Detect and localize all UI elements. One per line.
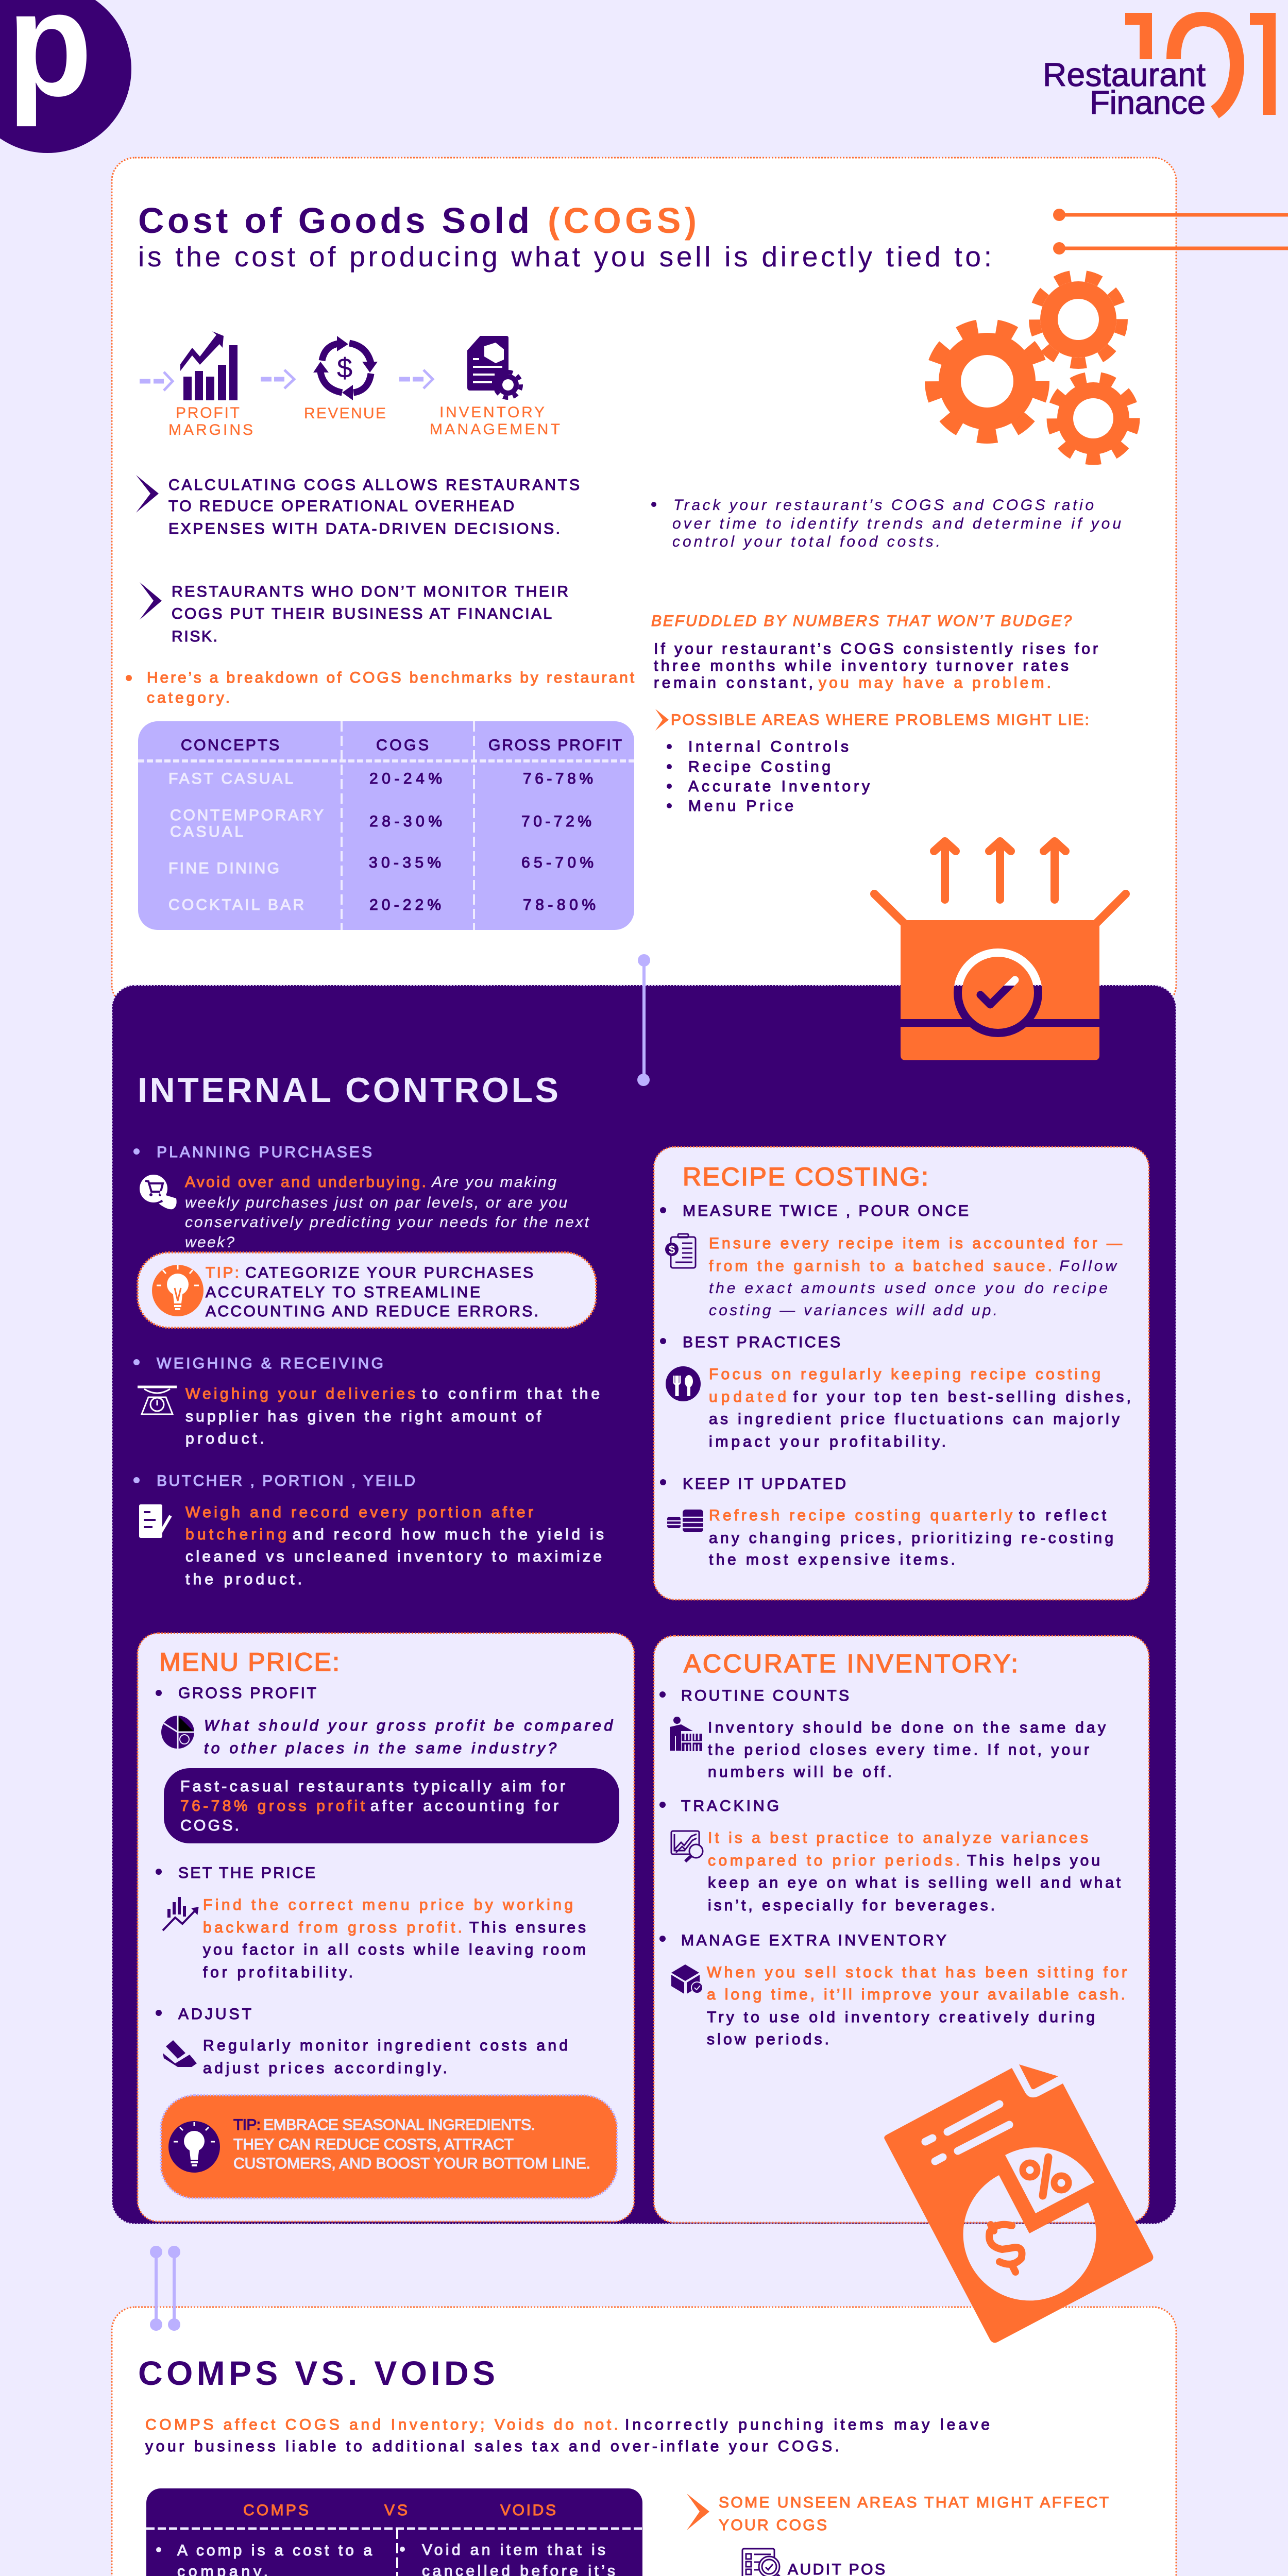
section: weighing and receiving: product. — [185, 1430, 264, 1447]
card: accurate inventory: This helps you — [967, 1852, 1100, 1869]
icon: orange report with pie chart — [884, 2064, 1153, 2343]
table: COGS benchmarks: FAST CASUAL — [168, 770, 293, 787]
card: recipe costing: Refresh recipe costing quarterly — [709, 1507, 1012, 1524]
callout: tip categorize purchases: ACCURATELY TO STREAMLINE — [206, 1284, 480, 1301]
callout: tip categorize purchases: TIP: — [206, 1264, 239, 1281]
card: recipe costing: Ensure every recipe item is accounted for — — [709, 1235, 1122, 1252]
text: befuddled by numbers — [651, 613, 1098, 691]
card: accurate inventory: Inventory should be done on the same day — [708, 1719, 1106, 1736]
callout: tip seasonal ingredients: TIP: — [233, 2116, 261, 2133]
card: menu price: for profitability. — [203, 1964, 353, 1981]
series logo: Restaurant Finance 101: Finance — [1090, 84, 1206, 121]
text: track COGS — [651, 497, 1121, 550]
card: recipe costing: the most expensive items. — [709, 1551, 955, 1568]
panel: comps vs voids — [0, 2307, 1176, 2576]
text: befuddled by numbers: you may have a problem. — [819, 674, 1051, 691]
card: accurate inventory — [654, 1636, 1149, 2223]
text: comps intro: COMPS affect COGS and Inventory; Voids do not. — [145, 2416, 618, 2433]
card: recipe costing: Focus on regularly keeping recipe costing — [709, 1366, 1100, 1383]
icon: cost clipboard — [665, 1234, 696, 1268]
text: track COGS: over time to identify trends and determine if you — [672, 515, 1121, 532]
table: COGS benchmarks: 28-30% — [369, 813, 442, 830]
card: menu price: you factor in all costs while leaving room — [203, 1941, 586, 1958]
table: COGS benchmarks: GROSS PROFIT — [488, 737, 622, 754]
panel: what is COGS — [112, 158, 1288, 1008]
connector lines top right — [1053, 209, 1288, 255]
table: COGS benchmarks: 70-72% — [521, 813, 591, 830]
section: butcher portion yield: butchering — [185, 1526, 286, 1543]
panel: internal controls — [112, 985, 1176, 2224]
table: COGS benchmarks: 78-80% — [523, 896, 596, 913]
text: benchmark intro — [126, 669, 635, 706]
card: accurate inventory: It is a best practice to analyze variances — [708, 1829, 1088, 1846]
card: recipe costing: for your top ten best-selling dishes, — [793, 1388, 1131, 1405]
heading: internal controls: INTERNAL CONTROLS — [138, 1071, 558, 1110]
list: comps: A comp is a cost to a — [177, 2542, 372, 2559]
icon: chart under magnifier — [671, 1831, 703, 1861]
icon: revenue cycle — [313, 336, 378, 400]
card: menu price: backward from gross profit. — [203, 1919, 462, 1936]
panel background — [112, 2307, 1176, 2576]
card: accurate inventory: a long time, it’ll improve your available cash. — [707, 1986, 1125, 2003]
icon: person counting boxes — [670, 1717, 702, 1751]
table: COGS benchmarks: CONTEMPORARY — [170, 807, 324, 824]
label: profit margins: PROFIT — [176, 404, 240, 421]
callout: calculating COGS: TO REDUCE OPERATIONAL OVERHEAD — [168, 498, 514, 515]
callout: fast-casual target: Fast-casual restaurants typically aim for — [180, 1778, 565, 1795]
label: profit margins — [168, 404, 253, 438]
heading: unseen areas: YOUR COGS — [719, 2517, 827, 2534]
card: menu price: ADJUST — [178, 2006, 251, 2023]
card: accurate inventory: keep an eye on what is selling well and what — [708, 1874, 1121, 1891]
table: COGS benchmarks — [138, 721, 634, 930]
table: COGS benchmarks: COCKTAIL BAR — [168, 896, 304, 913]
icon: light bulb — [168, 2121, 220, 2173]
icon: cart — [140, 1175, 177, 1209]
card: menu price: MENU PRICE: — [159, 1648, 340, 1676]
icon: checked package — [671, 1964, 703, 1994]
text: comps intro: Incorrectly punching items may leave — [625, 2416, 990, 2433]
table: comps vs voids: VOIDS — [500, 2502, 556, 2519]
list: voids — [400, 2541, 623, 2576]
text: comps intro: your business liable to additional sales tax and over-inflate your COGS. — [145, 2438, 839, 2455]
icon: plate with fork and spoon — [666, 1366, 701, 1401]
card: accurate inventory: ROUTINE COUNTS — [681, 1687, 849, 1704]
heading: Cost of Goods Sold: Cost of Goods Sold — [138, 200, 530, 241]
icon: revenue cycle: $ — [337, 353, 352, 384]
panel background — [112, 985, 1176, 2224]
text: befuddled by numbers: If your restaurant’s COGS consistently rises for — [654, 640, 1098, 657]
text: befuddled by numbers: remain constant, — [654, 674, 813, 691]
series logo: Restaurant Finance 101: Restaurant — [1043, 56, 1206, 93]
card: accurate inventory: When you sell stock that has been sitting for — [707, 1964, 1127, 1981]
card: accurate inventory: Try to use old inventory creatively during — [707, 2009, 1095, 2026]
panel background — [112, 158, 1176, 1008]
callout: restaurants who don't monitor — [140, 582, 568, 645]
text: track COGS: control your total food costs. — [672, 533, 940, 550]
section: weighing and receiving: supplier has given the right amount of — [185, 1408, 541, 1425]
card: menu price: Find the correct menu price by working — [203, 1896, 573, 1913]
card: recipe costing — [654, 1147, 1149, 1600]
arrow: into profit margins — [140, 372, 173, 391]
list: possible problem areas: POSSIBLE AREAS WHERE PROBLEMS MIGHT LIE: — [671, 711, 1089, 728]
icon: audit checklist — [742, 2549, 787, 2576]
section: planning purchases: PLANNING PURCHASES — [157, 1144, 372, 1161]
label: inventory management — [430, 404, 560, 438]
section: butcher portion yield — [133, 1472, 604, 1588]
callout: calculating COGS: EXPENSES WITH DATA-DRIVEN DECISIONS. — [168, 520, 560, 537]
section: butcher portion yield: BUTCHER , PORTION , YEILD — [157, 1472, 415, 1489]
list: possible problem areas: Menu Price — [688, 798, 793, 815]
section: weighing and receiving: to confirm that the — [422, 1385, 600, 1402]
card: menu price — [138, 1633, 634, 2222]
callout: calculating COGS: CALCULATING COGS ALLOWS RESTAURANTS — [168, 477, 580, 494]
icon: money in hand — [163, 2040, 197, 2067]
callout: fast-casual target: 76-78% gross profit — [180, 1798, 365, 1815]
table: COGS benchmarks: FINE DINING — [168, 860, 279, 877]
callout: calculating COGS — [136, 475, 580, 537]
card: recipe costing: KEEP IT UPDATED — [683, 1476, 846, 1493]
table: comps vs voids: VS — [384, 2502, 408, 2519]
section: butcher portion yield: and record how much the yield is — [293, 1526, 604, 1543]
card: accurate inventory: the period closes every time. If not, your — [708, 1741, 1089, 1758]
card: recipe costing: RECIPE COSTING: — [683, 1162, 928, 1191]
icon: inventory management — [467, 336, 521, 398]
section: weighing and receiving: Weighing your deliveries — [185, 1385, 415, 1402]
icon: price trend — [163, 1897, 198, 1930]
card: menu price: What should your gross profit be compared — [204, 1717, 613, 1734]
card: accurate inventory: isn’t, especially for beverages. — [708, 1897, 995, 1914]
table: COGS benchmarks: 65-70% — [521, 854, 594, 871]
callout: tip seasonal ingredients: EMBRACE SEASONAL INGREDIENTS. — [263, 2116, 535, 2133]
label: inventory management: MANAGEMENT — [430, 421, 560, 438]
icon: cost clipboard: $ — [669, 1243, 675, 1256]
callout: restaurants who don't monitor: RISK. — [172, 628, 217, 645]
card: menu price: to other places in the same industry? — [204, 1740, 556, 1757]
section: planning purchases: weekly purchases just on par levels, or are you — [185, 1194, 567, 1211]
card: menu price: SET THE PRICE — [178, 1865, 315, 1882]
table: COGS benchmarks: 30-35% — [369, 854, 441, 871]
card: accurate inventory: MANAGE EXTRA INVENTORY — [681, 1932, 946, 1949]
section: butcher portion yield: the product. — [185, 1571, 302, 1588]
heading: Cost of Goods Sold — [138, 200, 992, 273]
list: possible problem areas: Internal Controls — [688, 738, 849, 755]
card: recipe costing: Follow — [1059, 1258, 1117, 1275]
card: recipe costing: the exact amounts used once you do recipe — [709, 1280, 1108, 1297]
callout: tip seasonal ingredients: CUSTOMERS, AND BOOST YOUR BOTTOM LINE. — [233, 2155, 590, 2172]
card: menu price: GROSS PROFIT — [178, 1685, 316, 1702]
icon: coin stacks — [667, 1510, 703, 1532]
text: benchmark intro: Here’s a breakdown of COGS benchmarks by restaurant — [147, 669, 635, 686]
callout: tip seasonal ingredients — [161, 2095, 617, 2198]
card: accurate inventory: TRACKING — [681, 1798, 779, 1815]
icon: scale — [138, 1387, 177, 1414]
heading: unseen areas: SOME UNSEEN AREAS THAT MIGHT AFFECT — [719, 2494, 1109, 2511]
list: voids: Void an item that is — [422, 2541, 605, 2558]
icon: profit margins chart — [180, 331, 238, 400]
callout: tip categorize purchases — [138, 1252, 596, 1328]
callout: fast-casual target: after accounting for — [370, 1798, 558, 1815]
callout: tip categorize purchases: CATEGORIZE YOUR PURCHASES — [245, 1264, 533, 1281]
text: track COGS: Track your restaurant’s COGS and COGS ratio — [673, 497, 1094, 514]
table: COGS benchmarks: 20-24% — [369, 770, 442, 787]
card: menu price: Regularly monitor ingredient costs and — [203, 2037, 568, 2054]
callout: restaurants who don't monitor: RESTAURANTS WHO DON’T MONITOR THEIR — [172, 583, 568, 600]
section: butcher portion yield: cleaned vs uncleaned inventory to maximize — [185, 1548, 602, 1565]
text: benchmark intro: category. — [147, 689, 230, 706]
icon: open box with arrows — [874, 841, 1126, 1060]
card: accurate inventory: slow periods. — [707, 2031, 829, 2048]
table: COGS benchmarks: 76-78% — [523, 770, 593, 787]
table: COGS benchmarks: CASUAL — [170, 823, 243, 840]
heading: Cost of Goods Sold: (COGS) — [548, 200, 697, 241]
text: befuddled by numbers: BEFUDDLED BY NUMBERS THAT WON’T BUDGE? — [651, 613, 1072, 630]
section: butcher portion yield: Weigh and record every portion after — [185, 1504, 533, 1521]
card: recipe costing: BEST PRACTICES — [683, 1334, 840, 1351]
icon: profit pie — [161, 1716, 194, 1749]
icon: notes — [139, 1504, 171, 1538]
series logo: Restaurant Finance 101 — [1043, 13, 1276, 121]
text: comps intro — [145, 2416, 990, 2455]
connector: lavender line to internal controls — [637, 954, 650, 1086]
card: recipe costing: from the garnish to a batched sauce. — [709, 1258, 1052, 1275]
card: accurate inventory: compared to prior periods. — [708, 1852, 960, 1869]
callout: tip categorize purchases: ACCOUNTING AND REDUCE ERRORS. — [206, 1303, 538, 1320]
table: COGS benchmarks: CONCEPTS — [181, 737, 279, 754]
table: COGS benchmarks: COGS — [376, 737, 429, 754]
section: planning purchases: week? — [185, 1234, 234, 1251]
section: planning purchases — [133, 1144, 590, 1251]
callout: fast-casual target: COGS. — [180, 1817, 239, 1834]
heading: Cost of Goods Sold: is the cost of producing what you sell is directly tied to: — [138, 241, 992, 273]
table: COGS benchmarks: 20-22% — [369, 896, 441, 913]
table: comps vs voids: COMPS — [243, 2502, 309, 2519]
card: recipe costing: impact your profitability. — [709, 1433, 946, 1450]
list: possible problem areas: Accurate Inventory — [688, 778, 870, 795]
card: menu price: adjust prices accordingly. — [203, 2060, 447, 2077]
connector: lavender double lines — [150, 2246, 180, 2331]
card: recipe costing: as ingredient price fluctuations can majorly — [709, 1411, 1120, 1428]
section: planning purchases: Are you making — [431, 1174, 556, 1191]
table: comps vs voids — [146, 2488, 642, 2576]
card: accurate inventory: ACCURATE INVENTORY: — [684, 1649, 1018, 1678]
callout: restaurants who don't monitor: COGS PUT THEIR BUSINESS AT FINANCIAL — [172, 605, 552, 622]
label: profit margins: MARGINS — [168, 421, 253, 438]
logo: paperchase p badge — [0, 0, 131, 153]
card: recipe costing: costing — variances will add up. — [709, 1302, 997, 1319]
list: comps — [156, 2542, 372, 2576]
list: possible problem areas — [655, 709, 1089, 815]
section: planning purchases: conservatively predicting your needs for the next — [185, 1214, 590, 1231]
card: recipe costing: to reflect — [1019, 1507, 1107, 1524]
section: planning purchases: Avoid over and underbuying. — [185, 1174, 426, 1191]
heading: unseen areas — [687, 2494, 1109, 2534]
icon: light bulb — [152, 1265, 204, 1316]
label: inventory management: INVENTORY — [439, 404, 545, 421]
card: recipe costing: any changing prices, prioritizing re-costing — [709, 1530, 1113, 1547]
list: possible problem areas: Recipe Costing — [688, 758, 831, 775]
label: revenue: REVENUE — [304, 405, 386, 422]
card: accurate inventory: numbers will be off. — [708, 1764, 892, 1781]
card: menu price: This ensures — [469, 1919, 586, 1936]
section: weighing and receiving — [133, 1355, 600, 1447]
icon: gears — [932, 276, 1134, 460]
callout: tip seasonal ingredients: THEY CAN REDUCE COSTS, ATTRACT — [233, 2136, 514, 2153]
card: recipe costing: MEASURE TWICE , POUR ONCE — [683, 1202, 969, 1219]
callout: fast-casual target — [164, 1768, 619, 1843]
heading: comps vs voids: COMPS VS. VOIDS — [138, 2354, 495, 2392]
section: weighing and receiving: WEIGHING & RECEIVING — [157, 1355, 383, 1372]
text: befuddled by numbers: three months while inventory turnover rates — [654, 657, 1069, 674]
arrow: into inventory — [399, 370, 433, 388]
card: recipe costing: updated — [709, 1388, 786, 1405]
arrow: into revenue — [261, 370, 294, 388]
